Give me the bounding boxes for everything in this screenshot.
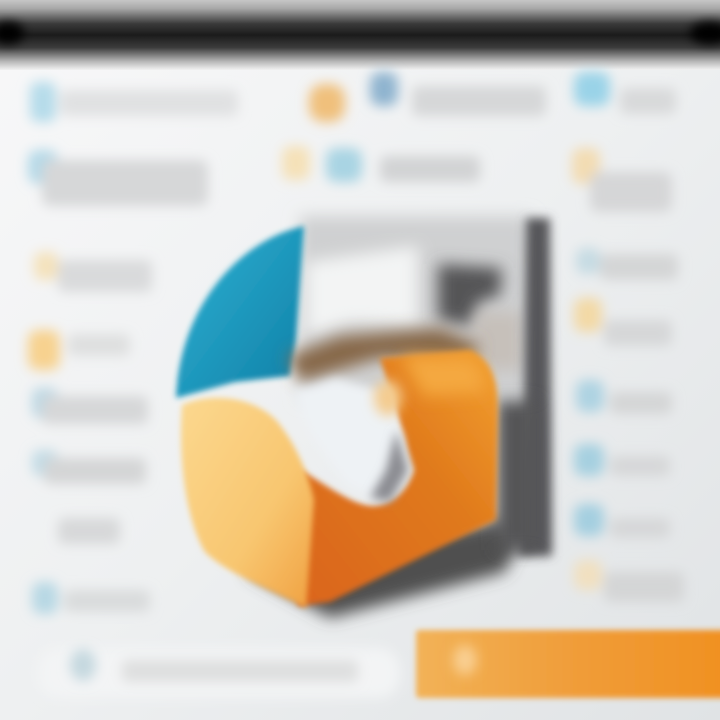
text: top right: [620, 88, 676, 114]
white upper slice: [306, 246, 418, 336]
dark block: [438, 264, 502, 326]
3D pie chart: [176, 216, 552, 618]
icon: top left: [30, 82, 56, 122]
text: right 7: [610, 518, 670, 538]
text: second centre: [380, 156, 480, 182]
dark vertical bar: [518, 218, 552, 556]
icon: right 3: [576, 248, 600, 274]
icon: right 8: [574, 560, 602, 590]
icon: top right: [574, 72, 610, 106]
top row items: [30, 72, 676, 122]
left column list: [28, 252, 152, 614]
icon: left 8: [32, 582, 58, 614]
header band: [0, 0, 720, 70]
teal slice: [176, 226, 304, 398]
icon: right 5: [576, 380, 604, 412]
icon: second right: [572, 148, 600, 184]
icon: left 6: [32, 450, 58, 476]
chart drop shadow: [245, 520, 520, 618]
icon: right 7: [574, 504, 604, 536]
wedge shadow: [370, 430, 408, 502]
text: right 5: [610, 392, 672, 414]
beige block: [474, 312, 522, 370]
text: left 5: [42, 396, 148, 424]
icon: left 4: [28, 330, 60, 370]
icon: left 5: [32, 388, 58, 418]
icon: second centre blue: [326, 148, 362, 182]
right column list: [574, 248, 684, 602]
text: top left: [60, 90, 238, 116]
text: right 3: [600, 254, 678, 280]
text: left 7: [58, 518, 120, 544]
text: left 6: [44, 458, 146, 484]
yellow slice: [181, 398, 314, 608]
text: right 8: [604, 572, 684, 602]
icon: top centre orange: [309, 84, 345, 122]
icon: right 6: [574, 444, 604, 476]
text: right 6: [610, 456, 670, 476]
second row items: [28, 146, 672, 212]
footer callout: orange banner: [416, 630, 720, 698]
icon: left 3: [34, 252, 58, 280]
icon: right 4: [574, 298, 602, 332]
icon: second centre yellow: [282, 146, 310, 180]
text: top centre: [412, 86, 546, 116]
white centre wedge: [292, 378, 402, 496]
pale orange accent: [374, 380, 402, 416]
orange slice: [298, 350, 498, 606]
text: left 8: [64, 590, 150, 612]
text: left 4: [68, 334, 130, 356]
icon: orange banner: [453, 645, 477, 675]
text: footer left: [122, 660, 358, 682]
side shadow: [496, 400, 538, 550]
text: second left: [42, 160, 208, 206]
footer callout: left pill: [38, 648, 400, 698]
text: right 4: [604, 320, 672, 346]
icon: footer left: [70, 649, 96, 681]
text: second right: [590, 172, 672, 212]
icon: top centre blue: [370, 72, 398, 106]
icon: second left: [28, 150, 58, 184]
highlight on orange slice: [402, 356, 484, 396]
grey upper panel: [300, 216, 530, 400]
brown divider: [288, 328, 480, 382]
text: left 3: [58, 260, 152, 292]
